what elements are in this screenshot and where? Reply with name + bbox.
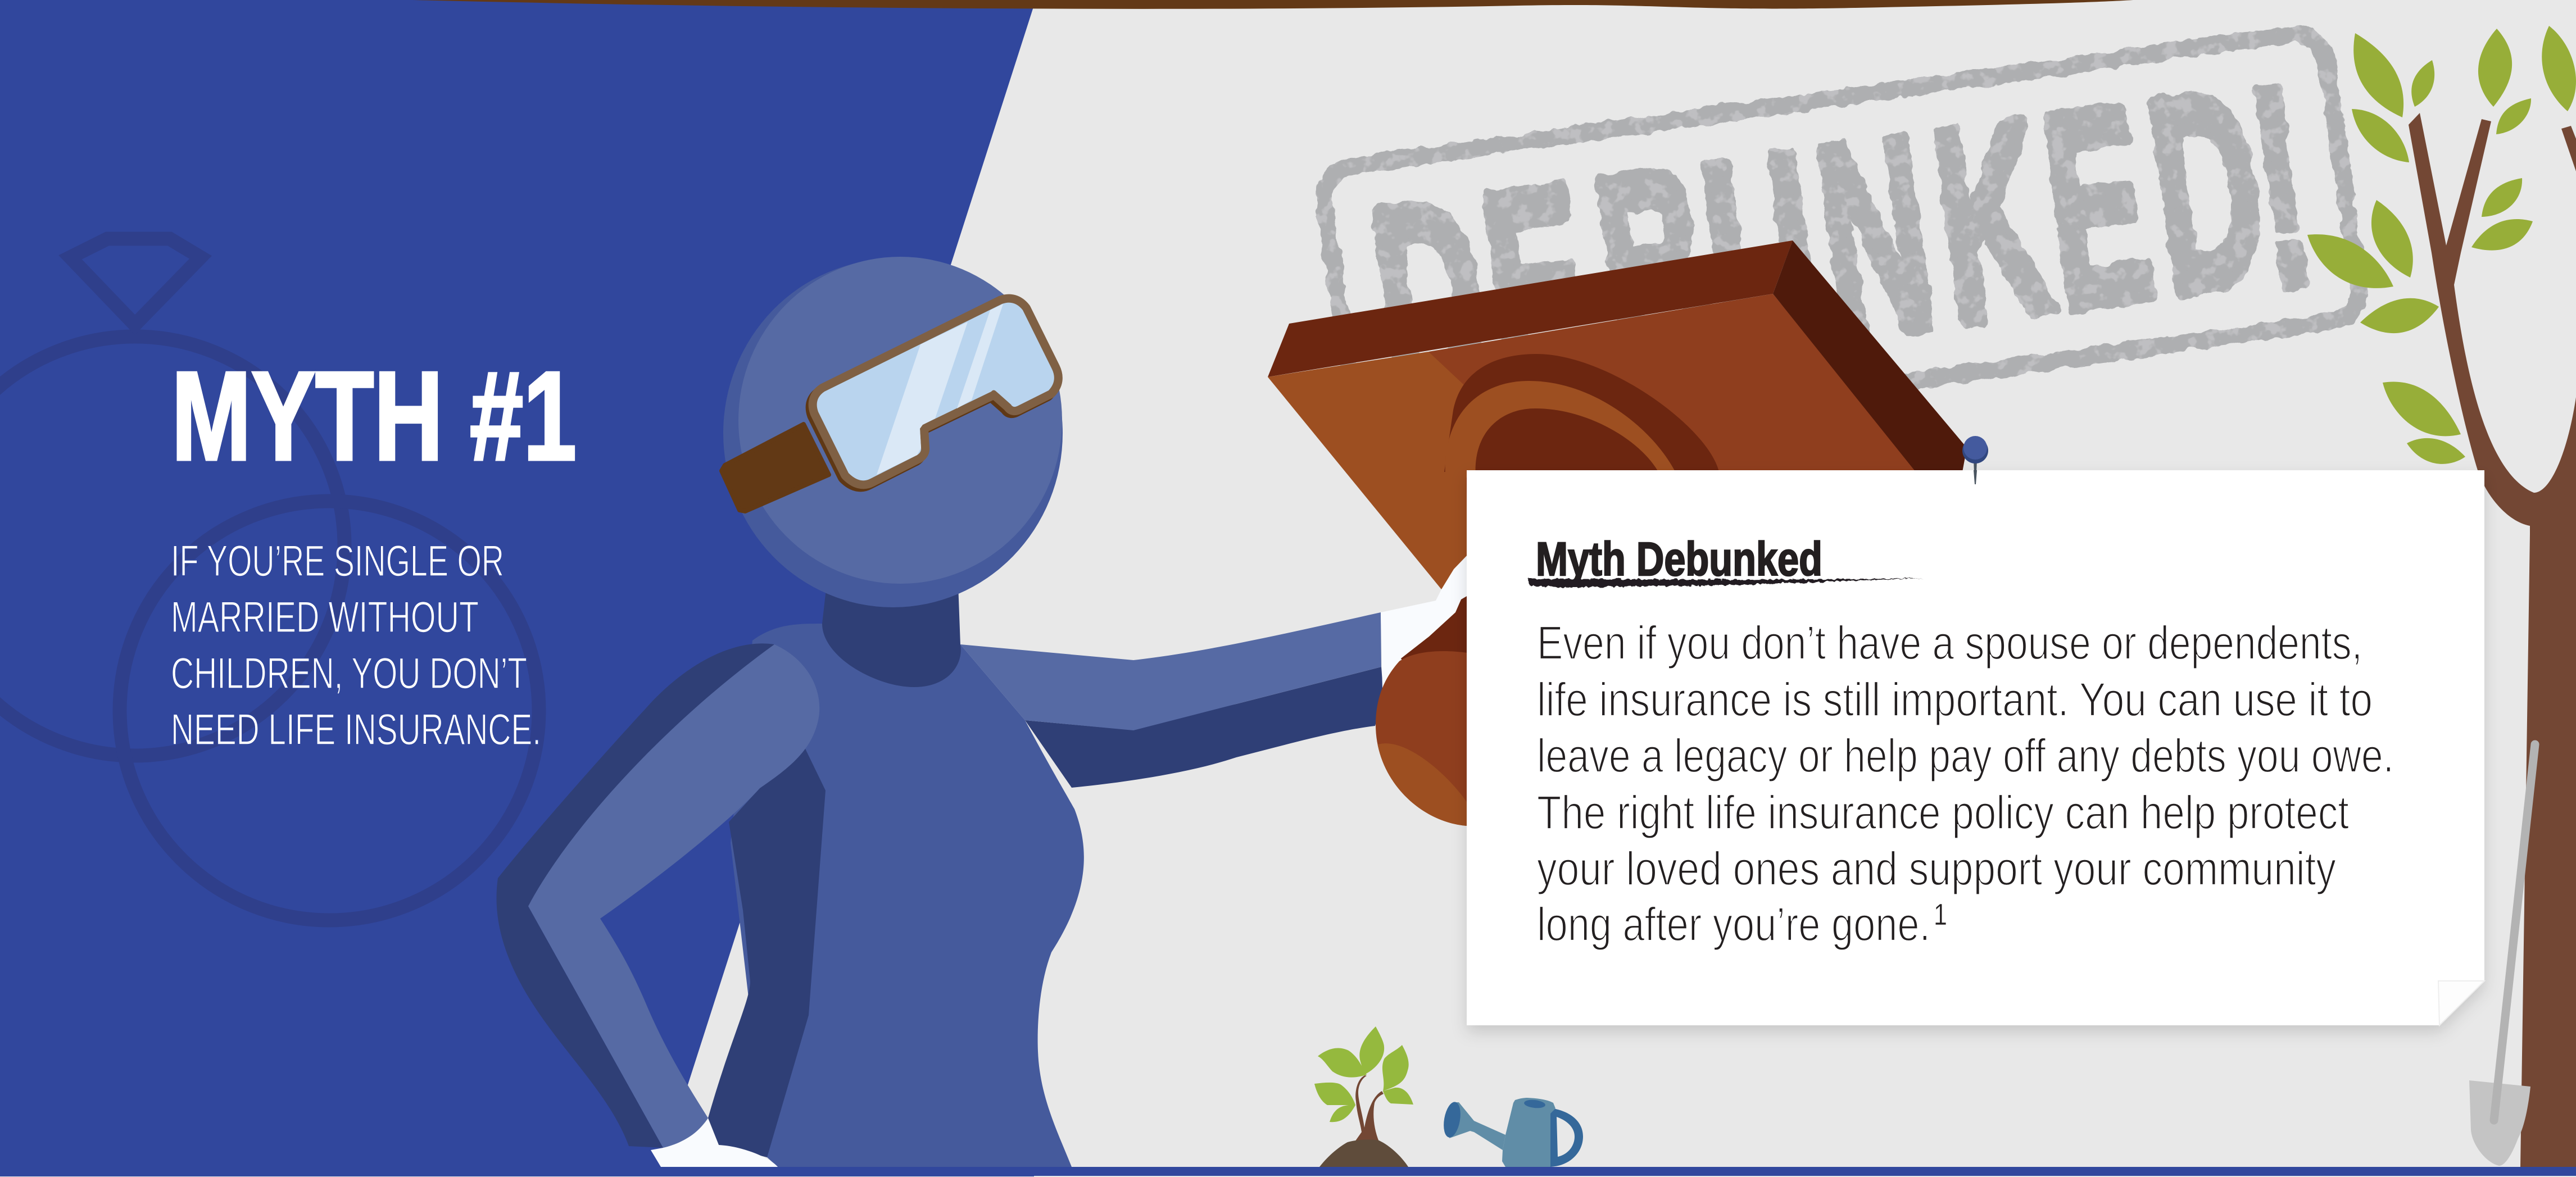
stamp frame (1320, 30, 2362, 458)
pin needle (1974, 461, 1977, 484)
card body (1537, 616, 2394, 951)
right branch (2561, 126, 2576, 171)
stamp text: ! (2234, 25, 2328, 347)
head shadow (723, 259, 1063, 607)
watering can (1441, 1098, 1583, 1167)
body line 5: your loved ones and support your community (1537, 842, 2336, 895)
card fold (2438, 981, 2484, 1025)
stamp text: DEBUNKED (1357, 32, 2281, 460)
person (496, 257, 1468, 1167)
held object dark (1401, 596, 1468, 669)
title: MYTH #1 (171, 345, 577, 487)
back shadow (708, 736, 826, 1157)
gloved hand (651, 1119, 778, 1167)
neck (822, 584, 961, 687)
body line 2: life insurance is still important. You can use it to (1537, 673, 2373, 726)
leaves (2307, 26, 2576, 464)
held object (1376, 651, 1468, 826)
goggles (722, 303, 1054, 511)
heading brush underline (1527, 578, 1924, 587)
cap arch middle (1445, 381, 1678, 478)
pin head highlight (1963, 436, 1987, 460)
pin (1962, 436, 1988, 484)
soil mound (1319, 1139, 1408, 1167)
goggle lens (817, 303, 1054, 480)
can spout (1449, 1102, 1505, 1150)
tree trunk and branches (2409, 113, 2576, 1167)
shovel handle (2494, 744, 2535, 1120)
sapling leaves (1314, 1026, 1413, 1122)
body line 4: The right life insurance policy can help protect (1537, 786, 2349, 839)
ring two (120, 501, 539, 920)
cap left face (1268, 352, 1484, 589)
left arm shadow (496, 643, 774, 1148)
top brown strip (413, 0, 2133, 9)
statement line 3: CHILDREN, YOU DON’T (171, 648, 527, 698)
blue panel (0, 0, 1036, 1176)
statement line 4: NEED LIFE INSURANCE. (171, 705, 541, 754)
card sheet (1467, 470, 2484, 1025)
can opening (1523, 1099, 1546, 1109)
cap top face (1268, 240, 1793, 377)
right glove (1381, 555, 1468, 689)
sapling stems (1355, 1075, 1384, 1142)
graduation cap (1268, 240, 1967, 589)
head (738, 257, 1062, 584)
sapling (1314, 1026, 1413, 1167)
stamp: debunked (1318, 20, 2365, 476)
footnote mark: 1 (1934, 898, 1947, 931)
held object light (1378, 744, 1467, 826)
bottom bar (0, 1167, 2576, 1176)
can body (1502, 1098, 1555, 1167)
icon: wedding rings (0, 239, 539, 920)
cap right face (1773, 240, 1967, 472)
can rose (1441, 1101, 1463, 1139)
extended arm (960, 612, 1381, 730)
cap arch outer (1444, 354, 1719, 472)
cap arch inner (1476, 408, 1661, 478)
pin tip over card (1974, 470, 1977, 484)
goggle strap (722, 424, 829, 511)
card heading: Myth Debunked (1536, 533, 1822, 585)
shovel (2469, 744, 2535, 1166)
ring one (0, 337, 344, 756)
body line 1: Even if you don’t have a spouse or dependents, (1537, 616, 2362, 669)
shovel blade (2469, 1080, 2530, 1166)
body line 6: long after you’re gone. (1537, 898, 1930, 951)
tree (2307, 26, 2576, 1167)
pin head (1962, 438, 1988, 463)
lens highlight thin (957, 304, 1003, 408)
torso (731, 624, 1084, 1167)
goggle frame shadow (814, 306, 1051, 483)
cap main face (1428, 294, 1916, 506)
note card (1467, 470, 2484, 1025)
statement line 1: IF YOU’RE SINGLE OR (171, 536, 504, 585)
diamond (70, 239, 201, 325)
left arm (528, 644, 819, 1148)
goggle frame (817, 303, 1054, 480)
lens highlight wide (877, 322, 968, 475)
body line 3: leave a legacy or help pay off any debts you owe. (1537, 729, 2394, 782)
can handle (1550, 1108, 1583, 1167)
myth statement (171, 536, 541, 754)
statement line 2: MARRIED WITHOUT (171, 592, 479, 642)
extended arm shadow (1025, 667, 1384, 788)
